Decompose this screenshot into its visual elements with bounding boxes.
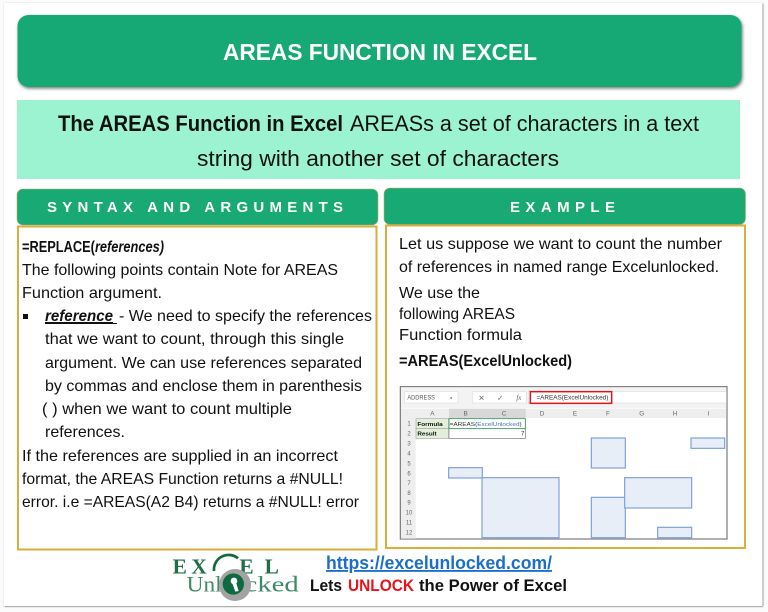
title banner: AREAS FUNCTION IN EXCEL (223, 39, 537, 65)
website link: https://excelunlocked.com/ (326, 552, 552, 573)
excel screenshot: E (573, 411, 577, 418)
heading: syntax and arguments (17, 189, 378, 225)
syntax text box (18, 226, 376, 550)
excel screenshot: D (540, 411, 545, 418)
tagline: Lets (310, 576, 342, 595)
excel screenshot: H (673, 411, 678, 418)
syntax text box: argument. We can use references separated (45, 355, 362, 372)
panel: syntax and arguments (17, 189, 378, 550)
title banner (18, 15, 742, 87)
excel screenshot: =AREAS(ExcelUnlocked) (450, 422, 522, 428)
excel screenshot: 9 (407, 501, 411, 507)
description band: string with another set of characters (197, 146, 559, 171)
syntax text box: by commas and enclose them in parenthesis (45, 378, 362, 395)
excel screenshot: 12 (406, 530, 413, 536)
example text box: =AREAS(ExcelUnlocked) (399, 353, 572, 370)
description band: The AREAS Function in Excel (58, 111, 343, 136)
named range areas (449, 438, 725, 538)
column headers (401, 409, 726, 418)
excel screenshot: 4 (407, 451, 411, 457)
logo: Excel Unlocked: cked (245, 571, 299, 596)
excel screenshot: C (502, 411, 507, 418)
excel screenshot (400, 387, 727, 539)
example text box: Function formula (399, 327, 522, 344)
excel screenshot: Formula (417, 422, 444, 428)
syntax text box: =REPLACE(references) (22, 239, 164, 256)
tagline: the Power of Excel (419, 576, 567, 595)
excel screenshot: 7 (521, 432, 525, 438)
logo: Excel Unlocked (173, 555, 299, 601)
excel screenshot: ▾ (450, 395, 453, 400)
syntax text box: that we want to count, through this single (45, 331, 344, 348)
excel screenshot: ADDRESS (407, 396, 435, 402)
tagline (310, 576, 567, 595)
syntax text box: ( ) when we want to count multiple (42, 401, 292, 418)
example text box: of references in named range Excelunlocked. (399, 259, 719, 276)
heading: syntax and arguments: SYNTAX AND ARGUMENTS (47, 199, 343, 216)
syntax text box: format, the AREAS Function returns a #NULL! (22, 471, 343, 488)
excel screenshot: fx (516, 394, 522, 402)
excel screenshot: ✕ (478, 393, 484, 402)
heading: example: EXAMPLE (510, 199, 615, 216)
excel screenshot: Result (417, 432, 437, 438)
excel screenshot: G (639, 411, 644, 418)
syntax text box: references. (45, 424, 125, 441)
excel screenshot: F (606, 411, 610, 418)
example text box: following AREAS (399, 306, 515, 323)
excel screenshot: 1 (407, 422, 411, 428)
excel screenshot: B (464, 411, 468, 418)
panel: example (384, 188, 746, 548)
excel screenshot: 2 (407, 432, 411, 438)
syntax text box: If the references are supplied in an incorrect (22, 448, 339, 465)
syntax text box: error. i.e =AREAS(A2 B4) returns a #NULL! error (22, 494, 360, 511)
formula highlight (530, 392, 612, 403)
excel screenshot: 8 (407, 491, 411, 497)
icon: padlock (219, 569, 251, 601)
excel screenshot: 6 (407, 471, 411, 477)
syntax text box: The following points contain Note for AREAS (22, 262, 338, 279)
excel screenshot: I (707, 411, 709, 418)
example text box: We use the (399, 285, 480, 302)
formula cells (416, 419, 449, 438)
example text box (386, 226, 745, 548)
excel screenshot: 5 (407, 461, 411, 467)
example text box: Let us suppose we want to count the number (399, 236, 723, 253)
tagline: UNLOCK (348, 576, 415, 595)
excel screenshot: 10 (406, 511, 413, 517)
excel screenshot: 11 (406, 521, 413, 527)
syntax text box: - We need to specify the references (119, 308, 372, 325)
logo: Excel Unlocked: Unl (187, 571, 222, 596)
logo: Excel Unlocked: L (265, 555, 279, 579)
excel screenshot: 7 (407, 481, 411, 487)
description band (17, 100, 740, 179)
heading: example (384, 188, 746, 224)
logo: Excel Unlocked: E (239, 555, 254, 579)
excel screenshot: ✓ (497, 393, 503, 402)
syntax text box: Function argument. (22, 285, 162, 302)
syntax text box: reference (45, 308, 113, 325)
excel screenshot: A (430, 411, 435, 418)
excel screenshot: 3 (407, 442, 411, 448)
excel screenshot: =AREAS(ExcelUnlocked) (536, 396, 608, 402)
logo: Excel Unlocked: E (173, 555, 187, 579)
logo: Excel Unlocked: X (191, 555, 207, 579)
description band: AREASs a set of characters in a text (350, 111, 699, 136)
